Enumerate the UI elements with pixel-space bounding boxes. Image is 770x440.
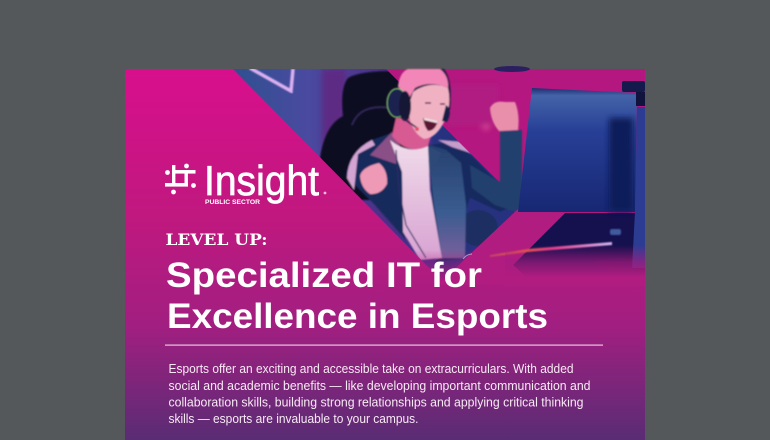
eyebrow: level up: LEVEL UP:: [166, 230, 268, 249]
magenta document card: [125, 69, 645, 440]
plant shadow: [465, 210, 498, 246]
pink upper room panel: [380, 69, 645, 213]
person bottom fade: [412, 250, 475, 285]
hair: [398, 69, 448, 100]
purple lights on wall: [322, 69, 346, 159]
registered mark: [324, 192, 326, 194]
headband: [397, 69, 451, 110]
gaming chair: [320, 71, 410, 200]
logo mark: [165, 164, 196, 194]
divider rule: [165, 344, 603, 346]
room and chair behind gamer: [233, 68, 533, 284]
translucent diagonal band: [440, 210, 565, 285]
monitor stand shadow: [609, 118, 633, 212]
cable glint: [463, 254, 472, 259]
monitor arm: [632, 107, 645, 268]
ear cup: [387, 88, 407, 118]
face: [408, 85, 449, 139]
main title: [166, 256, 548, 336]
open mouth: [423, 118, 438, 131]
jacket right flap: [430, 145, 466, 258]
dark ceiling lamp: [494, 66, 530, 72]
desk base shadow: [594, 258, 646, 270]
monitor: [518, 88, 637, 212]
teeth: [424, 118, 438, 123]
infographic cover page: [125, 66, 645, 440]
white shirt: [390, 140, 442, 260]
collar right: [428, 146, 432, 173]
neon light strip: [490, 242, 612, 257]
intro paragraph: [168, 361, 590, 426]
microphone: [403, 118, 417, 128]
logo subtitle: PUBLIC SECTOR: [205, 199, 260, 206]
paragraph line 1: Esports offer an exciting and accessible take on extracurriculars. With added: [168, 361, 574, 376]
jacket left side: [346, 133, 406, 240]
headset cable: [396, 150, 426, 258]
desk speaker glints: [610, 229, 621, 235]
gamer head: [387, 69, 451, 139]
logo wordmark: Insight: [204, 157, 319, 204]
shoulder stripes: [347, 140, 375, 190]
left fist: [360, 163, 387, 194]
lights in room: [448, 85, 498, 130]
neon sign: [250, 68, 293, 91]
jacket right side: [428, 143, 506, 262]
paragraph line 4: skills — esports are invaluable to your campus.: [168, 411, 418, 426]
title line 2: Excellence in Esports: [167, 297, 548, 336]
title line 1: Specialized IT for: [166, 256, 482, 295]
webcam: [622, 81, 645, 92]
raised arm and fist: [470, 102, 522, 212]
photo: esports gamer: [233, 66, 650, 290]
bottom fade: [505, 245, 645, 277]
collar left: [370, 132, 400, 164]
paragraph line 3: collaboration skills, building strong relationships and applying critical thinking: [168, 394, 584, 410]
scene blur group: [320, 71, 516, 275]
logo: Insight Public Sector: [165, 157, 326, 206]
eyes: [425, 103, 445, 104]
neck: [392, 118, 432, 149]
paragraph line 2: social and academic benefits — like developing important communication and: [168, 378, 590, 393]
dark wall strip right of gamer: [432, 125, 512, 272]
right dark desk area: [513, 213, 645, 274]
